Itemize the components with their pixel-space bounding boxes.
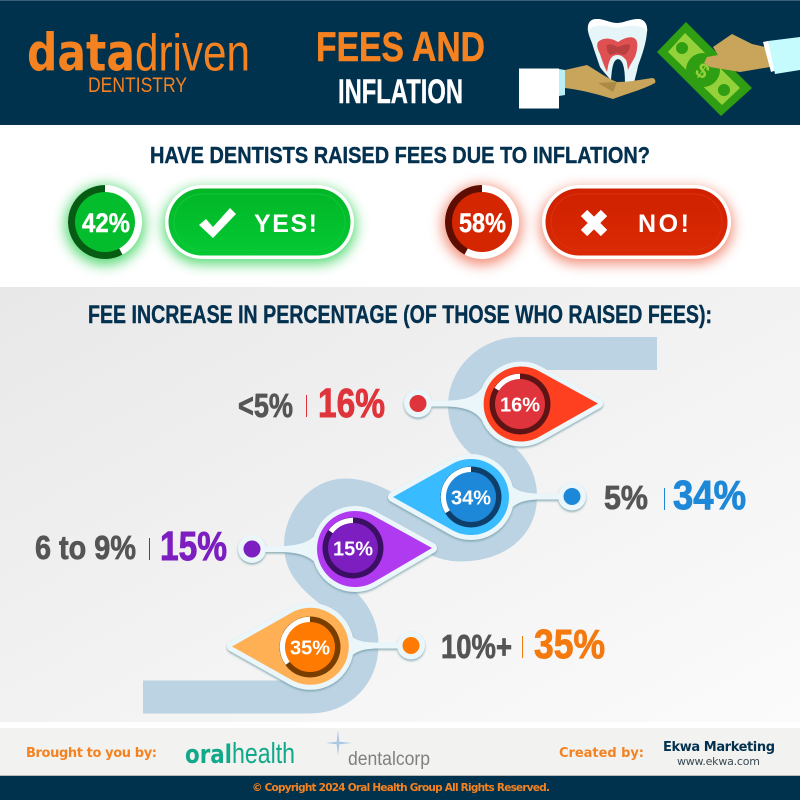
section background: survey question	[0, 125, 800, 287]
pin: 5 percent	[393, 459, 586, 535]
button: yes: YES!	[254, 210, 317, 238]
donut: 58 percent no	[442, 185, 522, 265]
logo: oral health	[185, 738, 295, 770]
illustration: hand holding tooth	[519, 19, 655, 108]
label: under 5 percent, 16 percent: <5%	[238, 387, 293, 424]
logo: data driven dentistry: data	[27, 24, 135, 84]
illustration: hand holding money	[657, 22, 800, 116]
text: ekwa marketing: Ekwa Marketing	[663, 740, 775, 755]
donut: 58 percent no: 58%	[459, 208, 506, 238]
header band	[0, 0, 800, 125]
section background: fee increase	[0, 287, 800, 722]
label: 10 percent plus, 35 percent: 35%	[534, 621, 605, 667]
label: 5 percent, 34 percent: 34%	[673, 472, 746, 518]
button: no: NO!	[638, 210, 689, 238]
pin: 10 percent plus	[232, 608, 425, 685]
label: 6 to 9 percent, 15 percent: 15%	[160, 523, 227, 569]
icon: cross mark	[584, 213, 604, 233]
ribbon path	[143, 354, 657, 697]
pin: 6 to 9 percent	[238, 511, 432, 587]
text: created by: Created by:	[559, 746, 644, 761]
logo: data driven dentistry: DENTISTRY	[88, 74, 187, 97]
logo: dentalcorp	[326, 730, 430, 770]
copyright bar: © Copyright 2024 Oral Health Group All Rights Reserved.	[252, 782, 550, 794]
illustration: hand holding money: $	[691, 58, 714, 84]
label: 6 to 9 percent, 15 percent: 6 to 9%	[35, 529, 136, 566]
label: 10 percent plus, 35 percent	[441, 621, 605, 667]
donut: 42 percent yes: 42%	[82, 208, 130, 238]
pin: under 5 percent	[404, 366, 598, 442]
label: 5 percent, 34 percent	[604, 472, 746, 518]
text: brought to you by: Brought to you by:	[26, 746, 157, 761]
logo: data driven dentistry: driven	[135, 24, 250, 82]
button: yes	[163, 185, 356, 264]
label: under 5 percent, 16 percent: 16%	[318, 380, 385, 426]
text: ekwa marketing: www.ekwa.com	[677, 755, 760, 768]
title	[316, 23, 485, 111]
button: no	[540, 185, 733, 264]
logo: oral health: health	[232, 738, 295, 770]
icon: check mark	[199, 208, 236, 238]
donut: 42 percent yes	[65, 185, 145, 265]
label: 6 to 9 percent, 15 percent	[35, 523, 227, 569]
title: INFLATION	[338, 73, 463, 111]
footer sponsors band	[0, 722, 800, 776]
logo: oral health: oral	[185, 740, 232, 770]
label: under 5 percent, 16 percent	[238, 380, 385, 426]
label: 5 percent, 34 percent: 5%	[604, 479, 648, 516]
pin: 6 to 9 percent: 15%	[333, 538, 373, 560]
title: FEES AND	[316, 23, 485, 70]
pin: under 5 percent: 16%	[500, 394, 540, 416]
pin: 10 percent plus: 35%	[290, 638, 330, 660]
logo: dentalcorp: dentalcorp	[348, 749, 430, 770]
heading: have dentists raised fees: HAVE DENTISTS RAISED FEES DUE TO INFLATION?	[150, 142, 650, 168]
copyright bar	[0, 776, 800, 800]
label: 10 percent plus, 35 percent: 10%+	[441, 628, 512, 665]
logo: data driven dentistry	[27, 24, 250, 97]
pin: 5 percent: 34%	[451, 488, 491, 510]
text: ekwa marketing	[663, 740, 775, 768]
